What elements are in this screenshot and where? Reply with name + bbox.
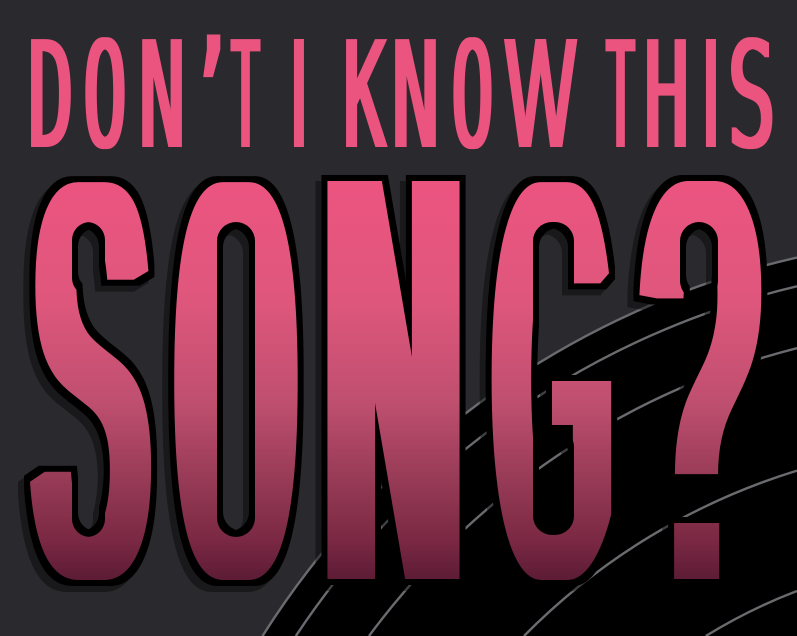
title line: ’ xyxy=(188,10,234,182)
title line: T xyxy=(606,10,635,182)
title line: N xyxy=(139,10,185,182)
vinyl record with grooves xyxy=(262,258,797,636)
title line: H xyxy=(644,10,689,182)
big word SONG? xyxy=(18,175,768,592)
title line: O xyxy=(83,10,127,182)
title line: O xyxy=(451,10,494,182)
title line: T xyxy=(231,10,260,182)
title line: D xyxy=(28,10,74,182)
title line: N xyxy=(392,10,439,182)
title line: I xyxy=(702,6,720,181)
title line: K xyxy=(343,10,386,182)
title line: W xyxy=(506,6,576,181)
title line: I xyxy=(290,6,308,181)
